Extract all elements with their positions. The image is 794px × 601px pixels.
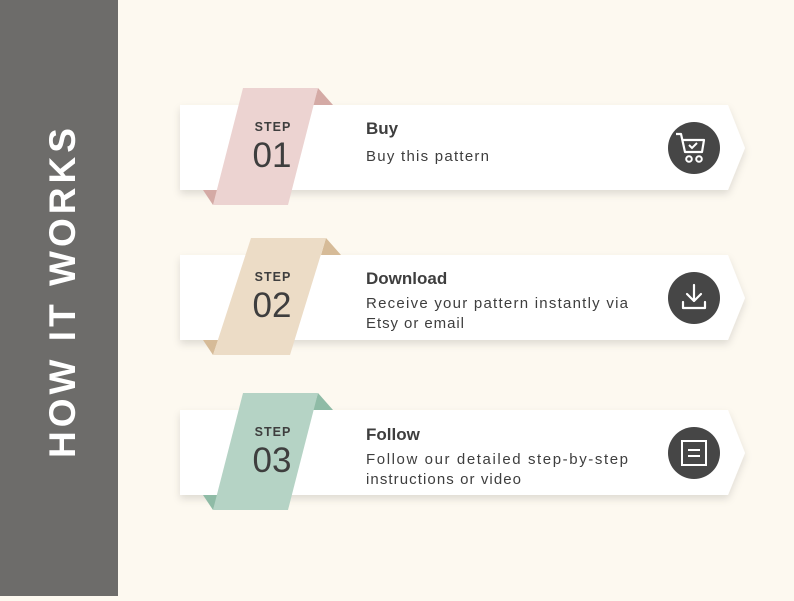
icon: document [668,427,720,479]
icon: cart [668,122,720,174]
ribbon 1: 01 [253,136,291,175]
heading: Buy: Buy [366,119,399,138]
ribbon 1 [203,88,333,205]
text: follow description: Follow our detailed step-by-step [366,451,628,468]
text: download description: Receive your pattern instantly via [366,295,629,312]
step 1 card [180,88,745,205]
ribbon 3: 03 [253,441,291,480]
text: follow description: instructions or video [366,471,521,488]
ribbon 2: 02 [253,286,291,325]
step 2 card [180,238,745,355]
sidebar [0,0,118,596]
heading: Download: Download [366,269,447,288]
ribbon 2: STEP [255,270,291,284]
heading: Follow: Follow [366,425,421,444]
ribbon 3 [203,393,333,510]
ribbon 1: STEP [255,120,291,134]
ribbon 2 [203,238,341,355]
text: Buy this pattern: Buy this pattern [366,148,489,165]
step 3 card [180,393,745,510]
ribbon 3: STEP [255,425,291,439]
title: HOW IT WORKS: HOW IT WORKS [42,128,83,458]
icon: download [668,272,720,324]
text: download description: Etsy or email [366,315,464,332]
